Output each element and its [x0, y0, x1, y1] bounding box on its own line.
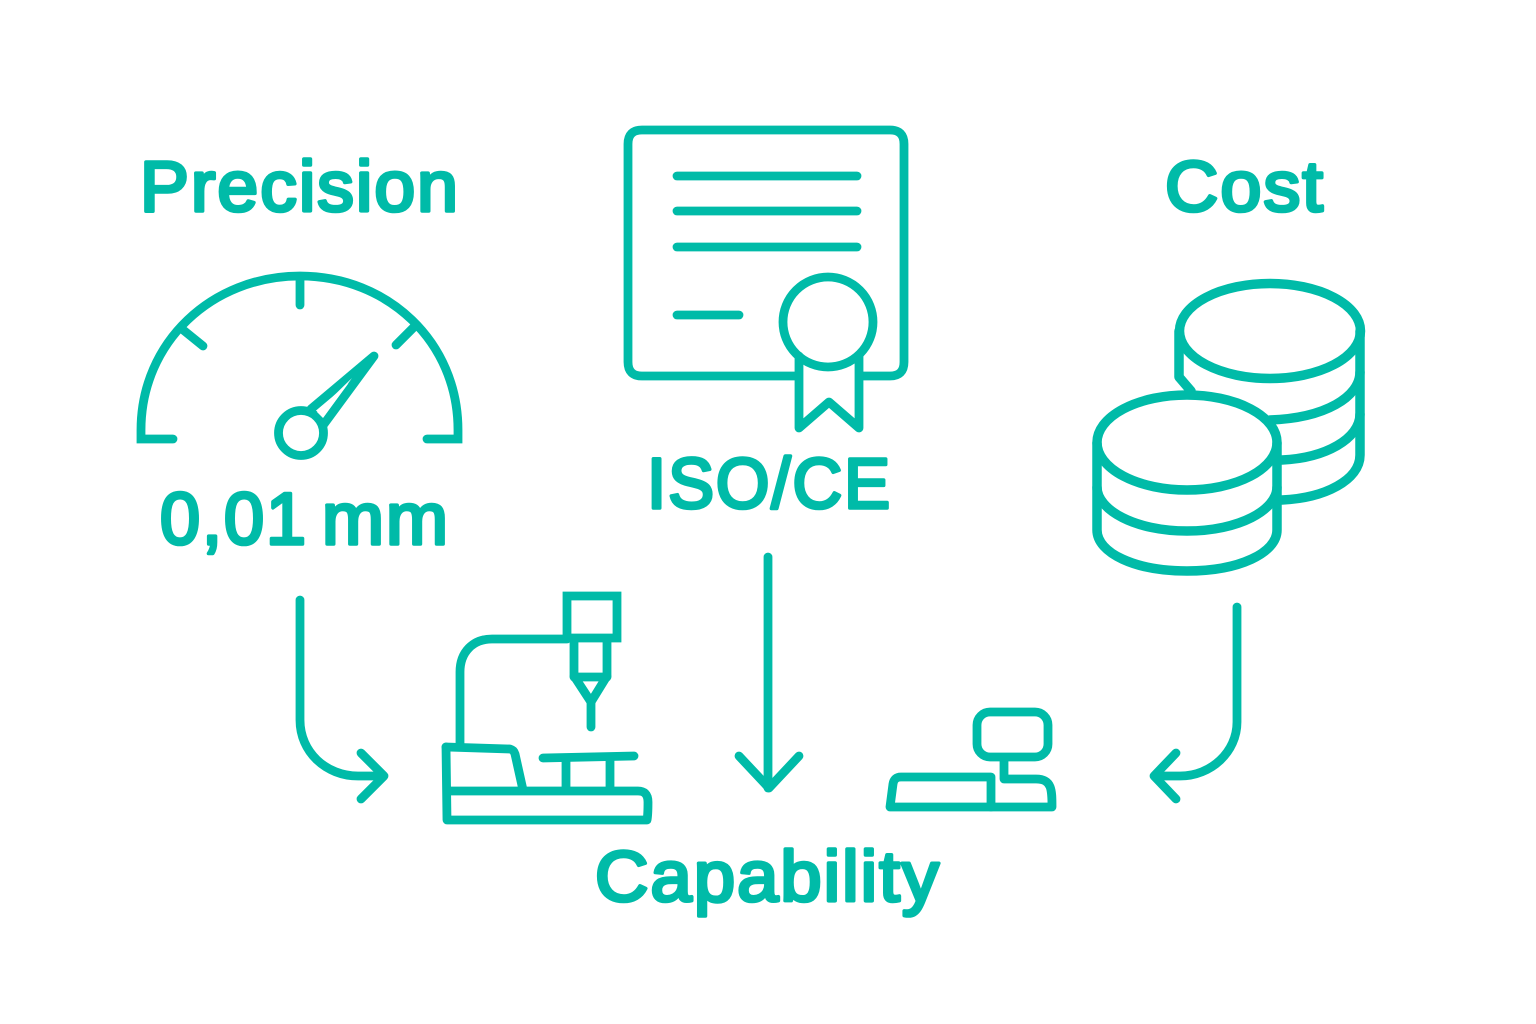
heading: Cost: Cost — [1165, 148, 1325, 227]
heading: Capability: Capability — [595, 838, 941, 917]
heading: Precision: Precision — [140, 148, 460, 227]
value: 0,01 mm: mm — [322, 479, 450, 560]
icon: certificate with ribbon — [628, 130, 904, 428]
icon: machine tool — [446, 596, 648, 820]
icon: precision gauge — [141, 276, 458, 456]
arrow: precision to capability — [300, 600, 384, 799]
arrow: certification to capability — [739, 557, 799, 788]
icon: coin stacks — [1097, 284, 1360, 571]
icon: small workstation — [890, 712, 1052, 807]
heading: ISO/CE: ISO/CE — [647, 445, 892, 524]
value: 0,01 mm: 0,01 — [160, 479, 308, 560]
arrow: cost to capability — [1154, 607, 1237, 799]
value: 0,01 mm — [160, 479, 450, 560]
